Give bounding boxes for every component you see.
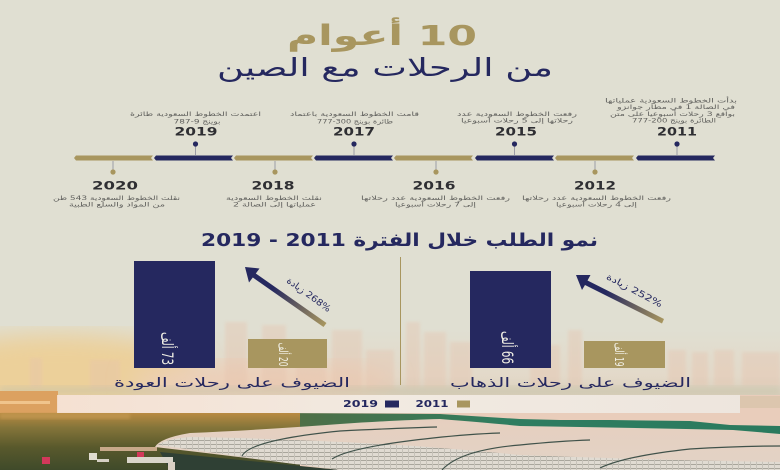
event 2012 xyxy=(522,178,671,208)
event 2011: بواقع 3 رحلات أسبوعيا على متن xyxy=(610,109,735,118)
event 2017: طائرة بوينج 300-777 xyxy=(317,118,393,126)
arrow: 252% increase xyxy=(576,272,664,324)
city skyline backdrop xyxy=(30,322,780,390)
event 2012: 2012 xyxy=(574,178,616,192)
event 2012: رفعت الخطوط السعودية عدد رحلاتها xyxy=(522,195,671,202)
chart: return flights xyxy=(114,261,350,391)
arrow: 268% increase: 268% زيادة xyxy=(284,276,333,315)
value: 20 thousand: 20 ألف xyxy=(276,342,292,367)
event 2016 xyxy=(361,178,510,208)
event 2017: 2017 xyxy=(333,124,375,138)
center divider xyxy=(400,257,401,385)
legend: 2011: 2011 xyxy=(416,399,448,410)
timeline bar xyxy=(74,156,715,160)
section heading: نمو الطلب خلال الفترة 2011 - 2019 xyxy=(201,230,598,251)
event 2017: قامت الخطوط السعودية باعتماد xyxy=(290,111,419,118)
event 2019: بوينج 9-787 xyxy=(174,118,221,126)
bar: 2011 return xyxy=(248,339,327,368)
value: 66 thousand: 66 ألف xyxy=(498,331,518,364)
event 2011: في الصالة 1 في مطار جوانزو xyxy=(615,104,735,111)
subtitle: من الرحلات مع الصين xyxy=(217,53,553,83)
event 2020: 2020 xyxy=(92,178,138,192)
event 2015: 2015 xyxy=(495,124,537,138)
event 2011: بدأت الخطوط السعودية عملياتها xyxy=(605,96,737,104)
bar: 2019 return xyxy=(134,261,215,368)
event 2018: عملياتها إلى الصالة 2 xyxy=(233,202,316,208)
event 2011 xyxy=(605,96,737,138)
timeline pins xyxy=(110,141,680,175)
event 2018: نقلت الخطوط السعودية xyxy=(226,195,322,202)
legend: 2019 xyxy=(343,399,399,410)
event 2016: إلى 7 رحلات أسبوعيا xyxy=(395,200,476,208)
photo: river and shore xyxy=(0,386,780,440)
value: 19 thousand: 19 ألف xyxy=(612,342,628,367)
event 2019: اعتمدت الخطوط السعودية طائرة xyxy=(130,111,261,118)
title: 10 أعوام xyxy=(287,17,477,52)
event 2020: من المواد والسلع الطبية xyxy=(69,202,165,208)
event 2017 xyxy=(290,111,419,138)
event 2019: 2019 xyxy=(174,124,218,138)
event 2018 xyxy=(226,178,322,208)
event 2018: 2018 xyxy=(252,178,294,192)
event 2019 xyxy=(130,111,261,138)
event 2020 xyxy=(53,178,180,208)
arrow: 268% increase xyxy=(245,267,333,327)
value: 73 thousand: 73 ألف xyxy=(158,332,178,365)
legend: 2019: 2019 xyxy=(343,399,378,410)
event 2011: 2011 xyxy=(657,124,697,138)
arrow: 252% increase: 252% زيادة xyxy=(604,272,664,310)
legend xyxy=(57,395,740,413)
bar: 2019 outbound xyxy=(470,271,551,368)
bar: 2011 outbound xyxy=(584,341,665,368)
event 2016: 2016 xyxy=(412,178,456,192)
event 2011: الطائرة بوينج 200-777 xyxy=(632,118,716,124)
event 2012: إلى 4 رحلات أسبوعيا xyxy=(556,200,637,208)
event 2016: رفعت الخطوط السعودية عدد رحلاتها xyxy=(361,195,510,202)
chart: outbound flights xyxy=(450,271,691,391)
label: outbound flight guests: الضيوف على رحلات الذهاب xyxy=(450,376,691,391)
event 2020: نقلت الخطوط السعودية 543 طن xyxy=(53,195,180,202)
event 2015 xyxy=(457,111,577,138)
event 2015: رفعت الخطوط السعودية عدد xyxy=(457,111,577,118)
photo: terminal roof xyxy=(155,419,780,470)
legend: 2011 xyxy=(416,399,470,410)
photo: trees xyxy=(0,413,780,470)
photo: ground buildings xyxy=(42,447,175,470)
label: return flight guests: الضيوف على رحلات العودة xyxy=(114,376,350,391)
event 2015: رحلاتها إلى 5 رحلات أسبوعيا xyxy=(461,116,573,124)
